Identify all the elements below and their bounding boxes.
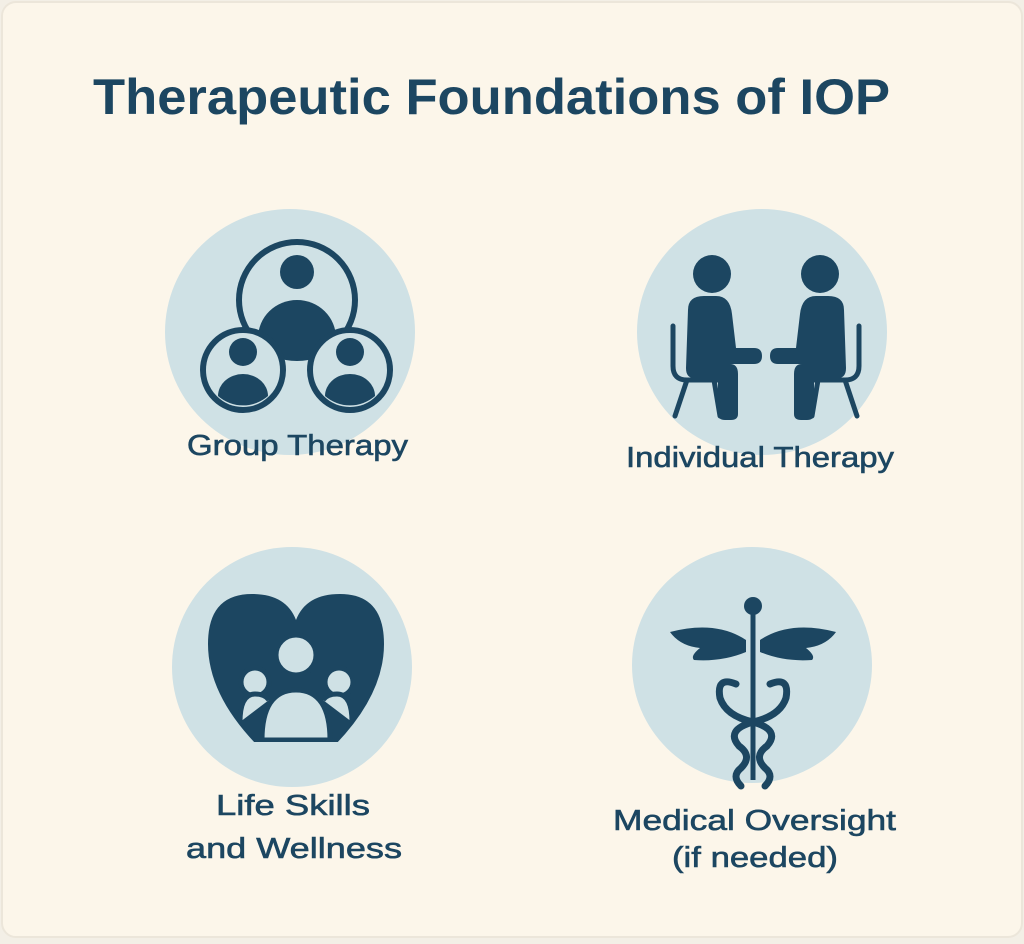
panel: medical oversight xyxy=(613,547,896,874)
label: life skills: Life Skills xyxy=(216,790,370,822)
label: group therapy: Group Therapy xyxy=(187,430,409,462)
panel: group therapy xyxy=(165,209,415,462)
panel: life skills: and Wellness xyxy=(186,833,402,865)
panel: individual therapy xyxy=(626,209,895,474)
label: medical oversight: Medical Oversight xyxy=(613,805,896,837)
label: individual therapy: Individual Therapy xyxy=(626,442,895,474)
panel: medical oversight: (if needed) xyxy=(672,842,838,874)
panel: life skills xyxy=(172,547,412,865)
icon: group xyxy=(203,242,390,410)
icon: caduceus xyxy=(670,597,836,786)
icon: two people seated xyxy=(673,255,859,420)
title: Therapeutic Foundations of IOP xyxy=(93,69,890,125)
icon: heart with family xyxy=(208,594,384,762)
